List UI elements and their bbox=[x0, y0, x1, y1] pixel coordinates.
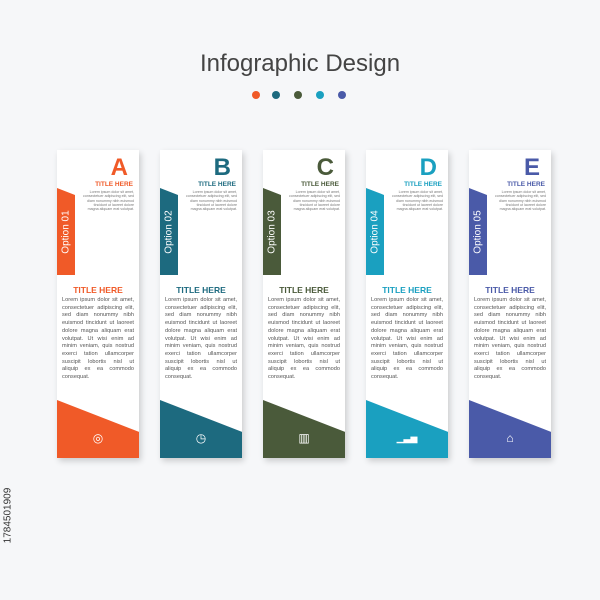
icon: target: ◎ bbox=[93, 431, 103, 445]
panel: option B bbox=[160, 150, 242, 458]
ribbon bbox=[263, 188, 281, 275]
ribbon: Option 05 bbox=[472, 210, 484, 253]
panel: option D: TITLE HERE bbox=[404, 181, 442, 188]
bottom shape bbox=[263, 400, 345, 458]
panel: option E: TITLE HERE bbox=[485, 285, 535, 295]
panel: option E: E bbox=[524, 154, 540, 181]
panel: option C: Lorem ipsum dolor sit amet, consectetuer adipiscing elit, sed diam nonummy nibh euismod tincidunt ut laoreet dolore magna aliquam erat volutpat. bbox=[289, 190, 340, 211]
panel: option C: Lorem ipsum dolor sit amet, consectetuer adipiscing elit, sed diam nonummy nibh euismod tincidunt ut laoreet dolore magna aliquam erat volutpat. Ut wisi enim ad minim veniam, quis nostrud exerci tation ullamcorper suscipit lobortis nisl ut aliquip ex ea commodo consequat. bbox=[268, 297, 340, 380]
icon: chart search: ▥ bbox=[298, 431, 310, 445]
bottom shape bbox=[366, 400, 448, 458]
panel: option B: TITLE HERE bbox=[198, 181, 236, 188]
panel: option C: C bbox=[317, 154, 334, 181]
stock id: 1784501909 bbox=[2, 488, 13, 543]
panel: option C bbox=[263, 150, 345, 458]
panel: option E: Lorem ipsum dolor sit amet, consectetuer adipiscing elit, sed diam nonummy nibh euismod tincidunt ut laoreet dolore magna aliquam erat volutpat. bbox=[495, 190, 546, 211]
bottom shape bbox=[57, 400, 139, 458]
panel: option A: TITLE HERE bbox=[73, 285, 123, 295]
ribbon bbox=[160, 188, 178, 275]
ribbon: Option 03 bbox=[266, 210, 278, 253]
panel: option E bbox=[469, 150, 551, 458]
ribbon: Option 02 bbox=[164, 210, 174, 253]
panel: option E: TITLE HERE bbox=[507, 181, 545, 188]
bottom shape bbox=[160, 400, 242, 458]
icon: growth chart: ▁▃▅ bbox=[397, 433, 417, 443]
ribbon bbox=[366, 188, 384, 275]
panel: option B: Lorem ipsum dolor sit amet, consectetuer adipiscing elit, sed diam nonummy nibh euismod tincidunt ut laoreet dolore magna aliquam erat volutpat. bbox=[186, 190, 237, 211]
bottom shape bbox=[469, 400, 551, 458]
panel: option C: TITLE HERE bbox=[279, 285, 329, 295]
panel: option B: B bbox=[214, 154, 231, 181]
ribbon: Option 01 bbox=[60, 210, 72, 253]
panel: option C: TITLE HERE bbox=[301, 181, 339, 188]
panel: option D: D bbox=[420, 154, 437, 181]
color dots bbox=[252, 91, 346, 99]
panel: option A: TITLE HERE bbox=[95, 181, 133, 188]
panel: option A: Lorem ipsum dolor sit amet, consectetuer adipiscing elit, sed diam nonummy nibh euismod tincidunt ut laoreet dolore magna aliquam erat volutpat. bbox=[83, 190, 134, 211]
icon: clock: ◷ bbox=[196, 431, 206, 445]
panel: option B: TITLE HERE bbox=[176, 285, 226, 295]
panel: option D bbox=[366, 150, 448, 458]
title: Infographic Design bbox=[200, 50, 400, 77]
panel: option A: A bbox=[111, 154, 128, 181]
ribbon bbox=[57, 188, 75, 275]
panel: option A bbox=[57, 150, 139, 458]
panel: option D: Lorem ipsum dolor sit amet, consectetuer adipiscing elit, sed diam nonummy nibh euismod tincidunt ut laoreet dolore magna aliquam erat volutpat. Ut wisi enim ad minim veniam, quis nostrud exerci tation ullamcorper suscipit lobortis nisl ut aliquip ex ea commodo consequat. bbox=[371, 297, 443, 380]
panel: option D: TITLE HERE bbox=[382, 285, 432, 295]
panel: option D: Lorem ipsum dolor sit amet, consectetuer adipiscing elit, sed diam nonummy nibh euismod tincidunt ut laoreet dolore magna aliquam erat volutpat. bbox=[392, 190, 443, 211]
ribbon: Option 04 bbox=[370, 210, 380, 253]
icon: house: ⌂ bbox=[506, 431, 514, 445]
panel: option A: Lorem ipsum dolor sit amet, consectetuer adipiscing elit, sed diam nonummy nibh euismod tincidunt ut laoreet dolore magna aliquam erat volutpat. Ut wisi enim ad minim veniam, quis nostrud exerci tation ullamcorper suscipit lobortis nisl ut aliquip ex ea commodo consequat. bbox=[62, 297, 134, 380]
ribbon bbox=[469, 188, 487, 275]
panel: option B: Lorem ipsum dolor sit amet, consectetuer adipiscing elit, sed diam nonummy nibh euismod tincidunt ut laoreet dolore magna aliquam erat volutpat. Ut wisi enim ad minim veniam, quis nostrud exerci tation ullamcorper suscipit lobortis nisl ut aliquip ex ea commodo consequat. bbox=[165, 297, 237, 380]
panel: option E: Lorem ipsum dolor sit amet, consectetuer adipiscing elit, sed diam nonummy nibh euismod tincidunt ut laoreet dolore magna aliquam erat volutpat. Ut wisi enim ad minim veniam, quis nostrud exerci tation ullamcorper suscipit lobortis nisl ut aliquip ex ea commodo consequat. bbox=[474, 297, 546, 380]
